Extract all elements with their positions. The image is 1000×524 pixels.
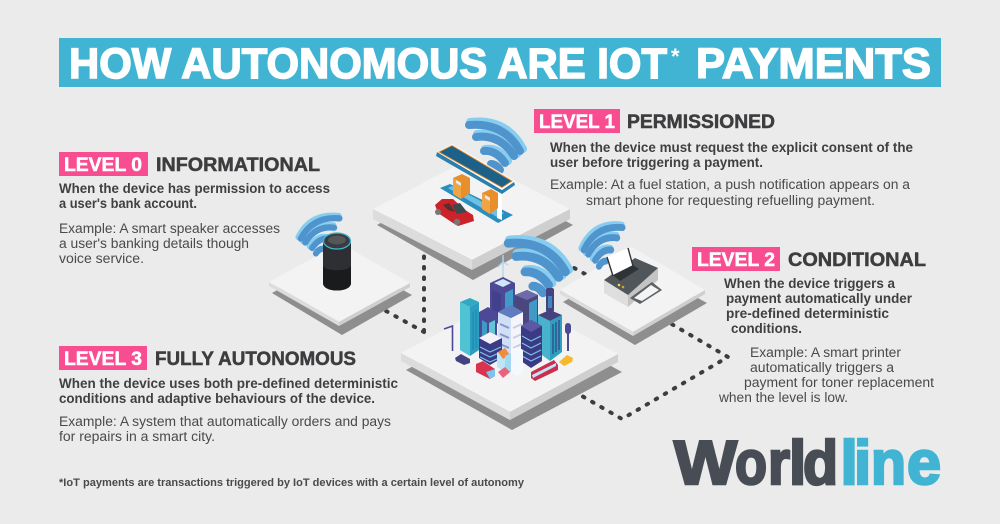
dotted connector: level 0 to level 3: [377, 306, 424, 332]
icon: wifi, smart speaker: [298, 216, 339, 253]
level 3 text: conditions and adaptive behaviours of the device.: [59, 391, 375, 406]
platform: level 0: [269, 243, 412, 335]
small shops: [497, 352, 505, 372]
right blue tower: [546, 288, 554, 312]
level 2 heading: LEVEL 2: [697, 250, 775, 271]
level 3 heading: LEVEL 3: [64, 349, 142, 370]
dark mid tower: [515, 290, 538, 336]
level 0 text: a user's bank account.: [59, 196, 197, 211]
logo: Worldline: l: [789, 429, 806, 498]
level 2 text: When the device triggers a: [724, 276, 895, 291]
dotted connector: level 1 to level 3: [422, 246, 426, 332]
level 3 text: for repairs in a smart city.: [59, 429, 215, 444]
level 0 text: When the device has permission to access: [59, 181, 330, 196]
logo: Worldline: l: [840, 429, 858, 498]
title banner: PAYMENTS: [696, 40, 931, 88]
platform: level 3: [401, 295, 622, 430]
level 1 text: Example: At a fuel station, a push notification appears on a: [550, 177, 910, 192]
dotted connector: level 2 to level 3 (top): [565, 263, 585, 274]
level 2 text: payment automatically under: [726, 291, 913, 306]
level 1 text: When the device must request the explicit consent of the: [550, 140, 913, 155]
level 2 text: payment for toner replacement: [744, 375, 934, 390]
street lamp: [444, 326, 452, 351]
level 2 heading: CONDITIONAL: [788, 250, 926, 271]
title banner: [59, 38, 941, 88]
logo: Worldline: e: [907, 429, 941, 498]
logo: Worldline: r: [768, 429, 790, 498]
level 3 heading: FULLY AUTONOMOUS: [155, 349, 356, 370]
level 0 text: Example: A smart speaker accesses: [59, 221, 280, 236]
logo: Worldline: n: [871, 429, 906, 498]
level 3 heading: [59, 346, 356, 370]
icon: fuel station: [436, 144, 515, 223]
level 0 text: voice service.: [59, 251, 144, 266]
icon: smart city: [444, 255, 573, 381]
logo: Worldline: o: [735, 429, 767, 498]
level 2 text: automatically triggers a: [750, 360, 895, 375]
level 1 text: smart phone for requesting refuelling payment.: [586, 193, 875, 208]
logo: Worldline: d: [803, 429, 838, 498]
footnote: *IoT payments are transactions triggered by IoT devices with a certain level of autonomy: [59, 477, 525, 489]
logo: Worldline: W: [674, 429, 738, 498]
icon: wifi, fuel station: [469, 122, 523, 170]
front center tower: [521, 320, 542, 368]
level 2 text: pre-defined deterministic: [726, 306, 889, 321]
level 1 text: [550, 140, 913, 208]
level 0 text: [59, 181, 330, 266]
dotted connector: level 2 to level 3 (bottom): [568, 319, 728, 419]
level 0 heading: INFORMATIONAL: [156, 155, 320, 176]
level 3 text: [59, 376, 398, 444]
title banner: *: [671, 44, 680, 69]
icon: red car: [435, 199, 474, 226]
white tower: [498, 312, 511, 358]
platform: level 1: [373, 158, 573, 280]
level 1 heading: [534, 109, 775, 133]
platform: level 2: [560, 247, 707, 345]
level 1 text: user before triggering a payment.: [550, 155, 763, 170]
level 2 text: when the level is low.: [718, 390, 848, 405]
icon: smart speaker: [323, 233, 351, 290]
traffic light: [567, 330, 569, 351]
level 3 text: When the device uses both pre-defined deterministic: [59, 376, 398, 391]
logo: Worldline: i: [854, 429, 871, 498]
level 2 text: [718, 276, 934, 405]
teal tower: [460, 302, 470, 356]
level 0 heading: LEVEL 0: [64, 155, 142, 176]
front left tower: [479, 332, 502, 365]
level 2 text: Example: A smart printer: [750, 345, 902, 360]
level 1 heading: LEVEL 1: [539, 112, 615, 133]
title banner: HOW AUTONOMOUS ARE IOT: [69, 40, 667, 88]
icon: printer: [604, 248, 662, 307]
purple tower: [490, 277, 515, 326]
level 2 text: conditions.: [731, 321, 802, 336]
vehicles: [476, 361, 495, 379]
small left tower: [479, 307, 497, 345]
icon: wifi, printer: [581, 225, 622, 266]
level 0 heading: [59, 152, 320, 176]
level 3 text: Example: A system that automatically orders and pays: [59, 414, 391, 429]
icon: wifi, smart city: [508, 239, 569, 293]
level 1 heading: PERMISSIONED: [627, 112, 775, 133]
level 2 heading: [692, 247, 926, 271]
level 0 text: a user's banking details though: [59, 236, 249, 251]
logo: Worldline: [674, 429, 941, 498]
